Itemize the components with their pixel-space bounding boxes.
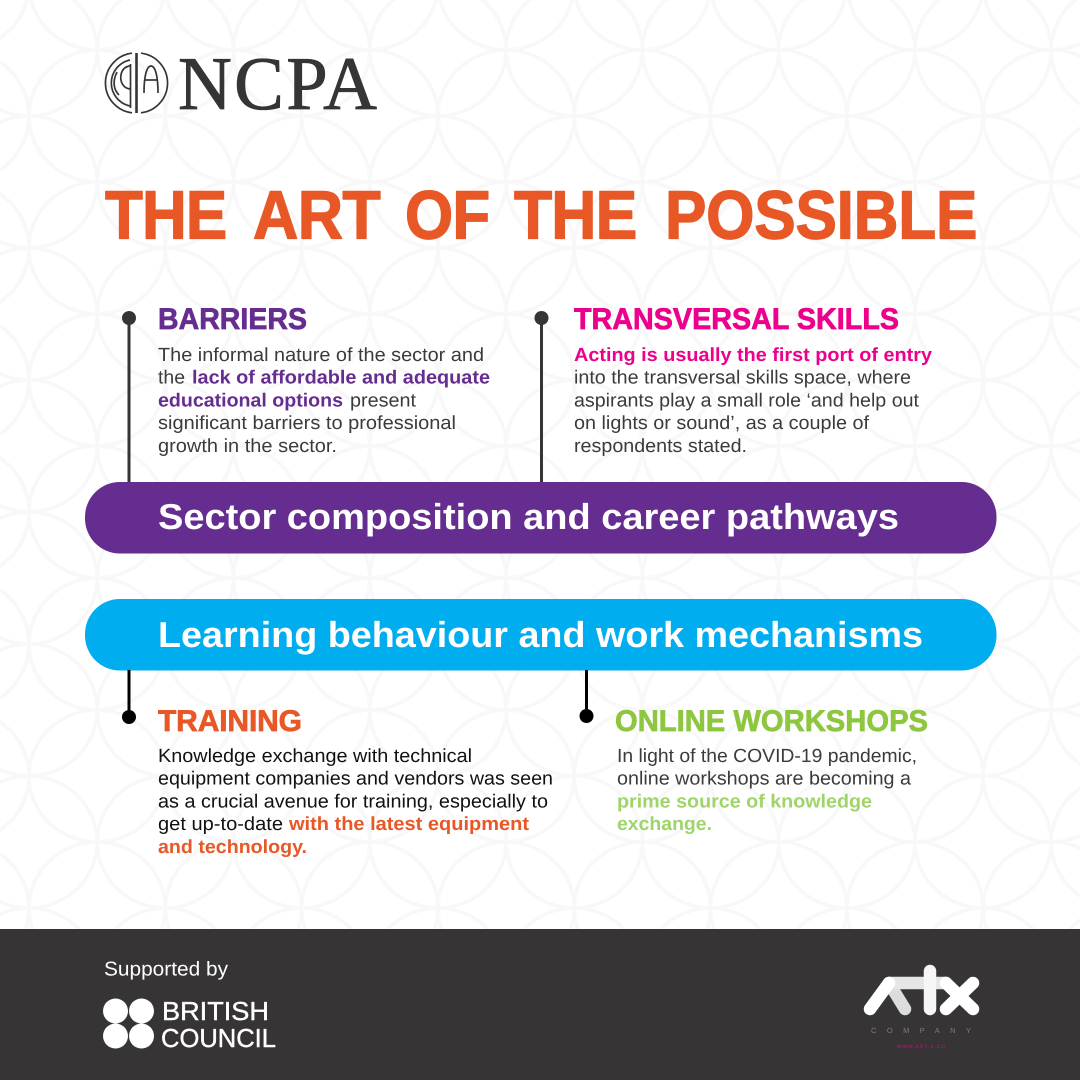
icon: NCPA emblem — [105, 53, 168, 113]
title — [105, 178, 977, 254]
logo: NCPA — [105, 43, 377, 126]
connector: online workshops timeline — [580, 670, 594, 723]
banner: learning behaviour: Learning behaviour and work mechanisms — [158, 614, 923, 655]
text: training body: equipment companies and vendors was seen — [158, 768, 553, 790]
text: barriers body: significant barriers to professional — [158, 413, 456, 434]
banner: sector composition — [85, 482, 996, 554]
text: transversal skills body: Acting is usually the first port of entry — [574, 345, 932, 366]
text: barriers body: the — [158, 368, 185, 388]
text: transversal skills body: aspirants play a small role ‘and help out — [574, 390, 920, 412]
text: barriers body — [158, 345, 490, 457]
logo: Art-X company — [870, 971, 973, 1050]
text: barriers body: growth in the sector. — [158, 436, 337, 457]
text: online workshops body — [617, 746, 917, 835]
text: online workshops body: In light of the COVID-19 pandemic, — [617, 746, 917, 767]
logo: Art-X company: COMPANY — [871, 1026, 971, 1035]
logo: British Council — [103, 996, 276, 1053]
text: barriers body: present — [350, 390, 417, 412]
panel: transversal skills — [534, 303, 932, 484]
text: online workshops body: online workshops are becoming a — [617, 768, 911, 790]
logo: British Council: COUNCIL — [161, 1023, 276, 1053]
text: training body: with the latest equipment — [288, 814, 530, 835]
text: transversal skills body — [574, 345, 932, 457]
title: POSSIBLE — [665, 178, 977, 254]
heading: barriers: BARRIERS — [158, 303, 307, 336]
title: THE — [105, 178, 227, 254]
heading: training: TRAINING — [158, 705, 302, 738]
banner: sector composition: Sector composition and career pathways — [158, 496, 899, 537]
text: training body: Knowledge exchange with technical — [158, 746, 472, 767]
text: training body: as a crucial avenue for training, especially to — [158, 792, 548, 812]
panel: barriers — [122, 303, 490, 484]
logo: Art-X company: WWW.ART-X.CO — [897, 1044, 945, 1050]
title: THE — [514, 178, 637, 254]
text: barriers body: educational options — [158, 390, 343, 412]
wordmark: NCPA — [178, 43, 377, 126]
text: supported by: Supported by — [104, 958, 228, 980]
text: training body: and technology. — [158, 837, 307, 858]
panel: online workshops — [580, 670, 928, 835]
connector: transversal skills timeline — [534, 311, 548, 484]
footer — [0, 929, 1080, 1080]
text: barriers body: The informal nature of the sector and — [158, 345, 484, 366]
text: online workshops body: exchange. — [617, 814, 712, 835]
text: online workshops body: prime source of knowledge — [617, 792, 872, 812]
heading: transversal skills: TRANSVERSAL SKILLS — [574, 303, 899, 336]
connector: barriers timeline — [122, 311, 136, 484]
title: ART — [253, 178, 381, 254]
text: training body: get up-to-date — [158, 814, 283, 835]
panel: training — [122, 670, 553, 858]
title: OF — [405, 178, 490, 254]
text: barriers body: lack of affordable and adequate — [192, 368, 490, 388]
banner: learning behaviour — [85, 599, 996, 670]
text: transversal skills body: respondents stated. — [574, 436, 747, 457]
text: transversal skills body: on lights or sound’, as a couple of — [574, 413, 870, 434]
logo: British Council: BRITISH — [162, 996, 269, 1026]
text: training body — [158, 746, 553, 858]
text: transversal skills body: into the transversal skills space, where — [574, 368, 911, 388]
connector: training timeline — [122, 670, 136, 724]
heading: online workshops: ONLINE WORKSHOPS — [615, 705, 928, 738]
